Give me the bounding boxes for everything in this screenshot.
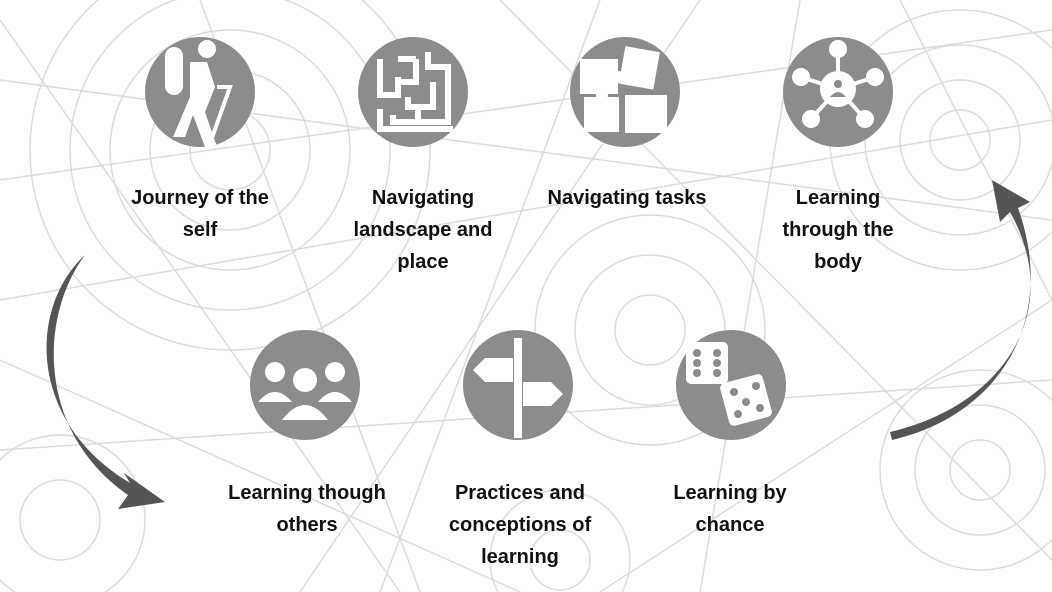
icon: maze (358, 37, 468, 147)
label: landscape: landscape and (354, 219, 492, 241)
arrow: left curved (46, 255, 165, 509)
label: practices (449, 482, 592, 568)
label: tasks: Navigating tasks (548, 187, 706, 209)
icon: dice (676, 330, 786, 440)
label: journey (131, 187, 269, 241)
label: chance: Learning by (673, 482, 787, 504)
label: chance (673, 482, 787, 536)
label: landscape: Navigating (372, 187, 474, 209)
arrow: right curved (890, 180, 1031, 440)
label: others (228, 482, 386, 536)
icon: people group (250, 330, 360, 440)
label: body: through the (782, 219, 894, 241)
label: landscape: place (397, 251, 449, 273)
label: others: others (276, 514, 338, 536)
label: landscape (354, 187, 492, 273)
label: practices: Practices and (455, 482, 585, 504)
label: chance: chance (696, 514, 764, 536)
label: journey: self (183, 219, 217, 241)
label: others: Learning though (228, 482, 386, 504)
label: practices: conceptions of (449, 514, 591, 536)
label: body: body (814, 251, 862, 273)
label: body (782, 187, 894, 273)
label: practices: learning (481, 546, 559, 568)
label: journey: Journey of the (131, 187, 269, 209)
icon: puzzle (570, 37, 680, 147)
icon: network person (783, 37, 893, 147)
icon: hiker (145, 37, 255, 147)
label: body: Learning (796, 187, 880, 209)
icon: signpost (463, 330, 573, 440)
